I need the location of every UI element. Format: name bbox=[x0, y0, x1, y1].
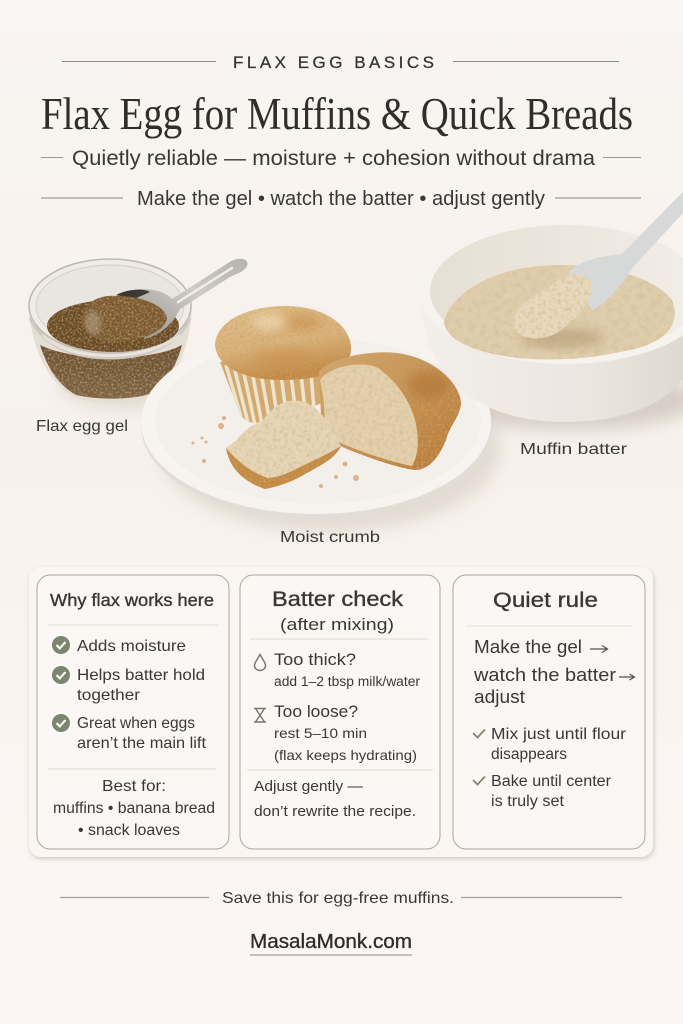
icon: drop bbox=[254, 654, 266, 670]
heading: batter check: (after mixing) bbox=[280, 615, 394, 634]
text: helps batter hold together: together bbox=[77, 687, 141, 704]
panel: info cards container bbox=[29, 567, 653, 857]
text: adjust gently bbox=[254, 778, 416, 820]
image: mixing bowl with batter bbox=[420, 222, 683, 422]
icon: check bake bbox=[473, 776, 485, 784]
icon: check batter bbox=[52, 666, 70, 684]
text: helps batter hold together bbox=[77, 667, 205, 704]
label: flax egg gel: Flax egg gel bbox=[36, 418, 128, 435]
text: make the gel steps: watch the batter bbox=[473, 665, 616, 685]
subtitle: Quietly reliable — moisture + cohesion without drama bbox=[72, 147, 595, 170]
icon: check eggs bbox=[52, 714, 70, 732]
arrow: to watch the batter bbox=[590, 646, 608, 652]
text: mix just until flour: Mix just until flour bbox=[491, 726, 626, 743]
text: bake until center bbox=[491, 773, 611, 810]
text: make the gel steps: Make the gel bbox=[474, 637, 582, 657]
text: best for: muffins • banana bread bbox=[53, 800, 215, 817]
tagline: Make the gel • watch the batter • adjust gently bbox=[137, 188, 545, 210]
text: too loose: rest 5–10 min bbox=[274, 725, 367, 741]
text: mix just until flour bbox=[491, 726, 626, 763]
text: best for: Best for: bbox=[102, 778, 166, 795]
label: moist crumb: Moist crumb bbox=[280, 529, 380, 546]
text: too loose: (flax keeps hydrating) bbox=[274, 747, 417, 763]
heading: why flax: Why flax works here bbox=[50, 590, 214, 610]
text: bake until center: Bake until center bbox=[491, 773, 611, 790]
icon: check moisture bbox=[52, 636, 70, 654]
icon: check mix bbox=[473, 730, 485, 738]
image: spatula and batter blob bbox=[513, 192, 683, 348]
text: adjust gently: don’t rewrite the recipe. bbox=[254, 803, 416, 820]
footer call to action: Save this for egg-free muffins. bbox=[222, 890, 454, 907]
text: great when eggs: aren’t the main lift bbox=[77, 735, 207, 752]
text: too thick bbox=[274, 650, 421, 689]
text: mix just until flour: disappears bbox=[491, 746, 567, 763]
text: too thick: add 1–2 tbsp milk/water bbox=[274, 674, 421, 689]
heading: batter check bbox=[272, 587, 403, 634]
heading: batter check: Batter check bbox=[272, 587, 403, 611]
image: torn muffin half bbox=[319, 352, 461, 470]
photo: table shadows bbox=[60, 361, 683, 532]
text: adds moisture: Adds moisture bbox=[77, 638, 186, 655]
text: make the gel steps: adjust bbox=[474, 687, 525, 707]
text: too loose: Too loose? bbox=[274, 702, 358, 721]
label: muffin batter: Muffin batter bbox=[520, 441, 628, 458]
text: too thick: Too thick? bbox=[274, 650, 356, 669]
panel: quiet rule bbox=[453, 575, 645, 849]
panel: batter check bbox=[240, 575, 440, 849]
text: bake until center: is truly set bbox=[491, 793, 565, 810]
image: whole muffin bbox=[215, 306, 351, 426]
arrow: to adjust bbox=[619, 674, 634, 680]
brand link: MasalaMonk.com bbox=[250, 931, 412, 953]
text: too loose bbox=[274, 702, 417, 763]
panel: why flax works here bbox=[37, 575, 229, 849]
heading: quiet rule: Quiet rule bbox=[493, 588, 598, 612]
image: muffin crumb piece bbox=[226, 400, 341, 489]
image: spoon with gel bbox=[82, 259, 247, 342]
image: crumbs on plate bbox=[192, 416, 359, 488]
image: glass bowl of flax gel bbox=[29, 259, 192, 403]
text: best for: • snack loaves bbox=[78, 822, 180, 839]
text: best for bbox=[53, 778, 215, 839]
text: make the gel steps bbox=[473, 637, 616, 707]
eyebrow heading: FLAX EGG BASICS bbox=[233, 53, 434, 72]
icon: hourglass bbox=[254, 708, 266, 722]
image: white plate bbox=[141, 330, 491, 519]
text: great when eggs bbox=[77, 715, 207, 752]
text: helps batter hold together: Helps batter hold bbox=[77, 667, 205, 684]
text: great when eggs: Great when eggs bbox=[77, 715, 195, 732]
text: adjust gently: Adjust gently — bbox=[254, 778, 363, 795]
